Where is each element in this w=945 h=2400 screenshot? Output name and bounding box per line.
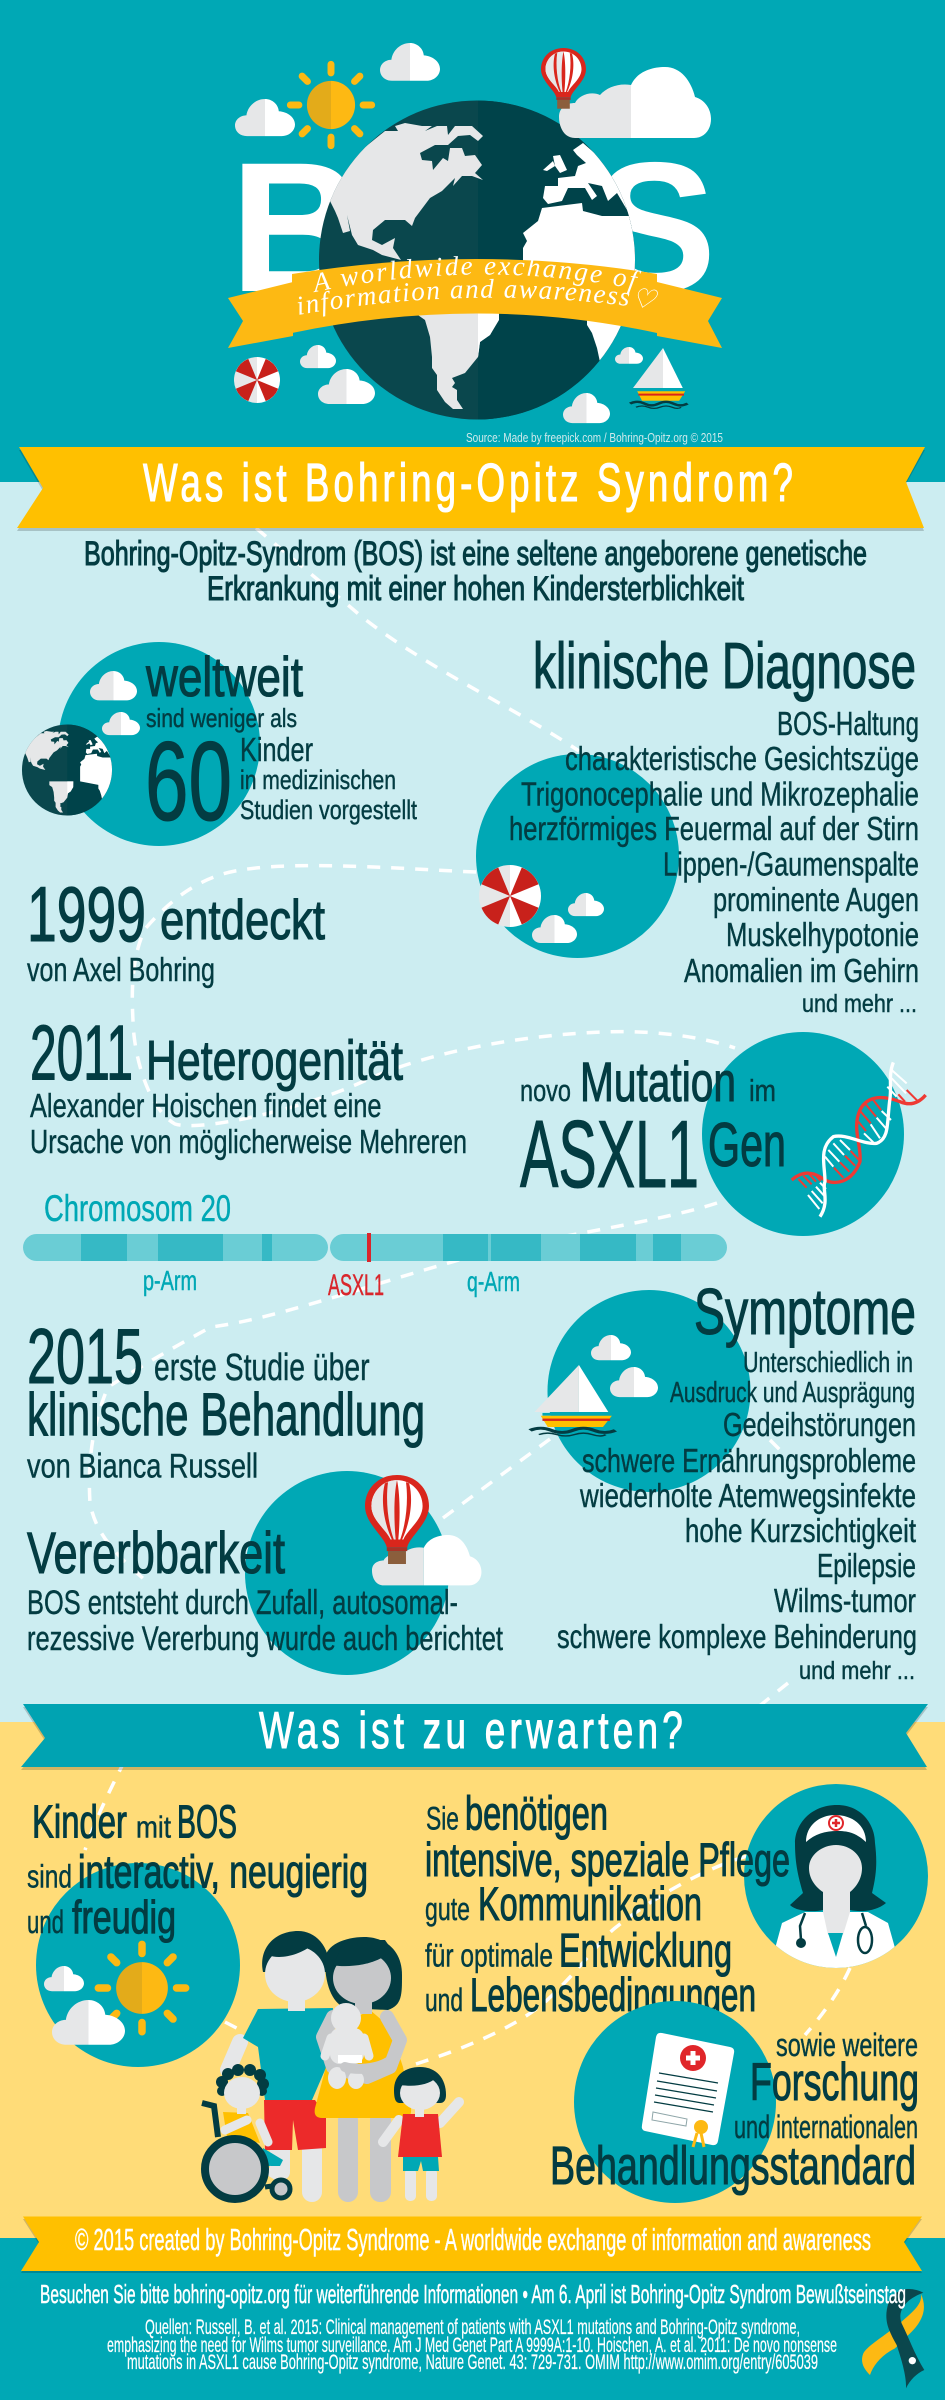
text block: für optimale (425, 1938, 553, 1974)
circle (702, 1032, 904, 1236)
text block: in medizinischen (240, 765, 396, 795)
panel: weltweit (19, 642, 417, 846)
text block (145, 645, 417, 844)
background: teal top (0, 0, 945, 483)
circle (548, 1290, 750, 1492)
circle (744, 1784, 928, 1968)
text block: BOS entsteht durch Zufall, autosomal- (27, 1584, 458, 1622)
icon: awareness ribbon (862, 2289, 924, 2388)
text block: 2015 klinische Behandlung: 2015 (27, 1312, 143, 1400)
background: teal footer (0, 2238, 945, 2400)
icon: sailboat (530, 1365, 615, 1436)
banner: Was ist Bohring-Opitz Syndrom? (17, 447, 925, 531)
girl waving (383, 2067, 459, 2201)
text block: Mutation (580, 1050, 736, 1113)
labels: q-Arm (467, 1266, 520, 1297)
text block: 1999 entdeckt: von Axel Bohring (27, 951, 215, 988)
icon: sailboat (630, 348, 688, 408)
text block: interactiv, neugierig (78, 1846, 368, 1898)
labels: ASXL1 (328, 1269, 384, 1302)
text block: Studien vorgestellt (240, 795, 417, 825)
symptom list: und mehr ... (799, 1657, 915, 1685)
text block: sind (27, 1858, 72, 1894)
icon: clouds (90, 671, 140, 735)
background: light blue section (0, 482, 945, 1722)
footer: sources (107, 2316, 837, 2374)
dashed connector path (85, 528, 850, 2064)
banner: copyright (21, 2216, 922, 2273)
text block: Entwicklung (559, 1924, 732, 1976)
panel: klinische Diagnose (476, 629, 919, 1018)
text block: weltweit (145, 645, 303, 708)
icon: hot air balloon (541, 48, 586, 109)
circle (58, 642, 260, 846)
heading: Was ist zu erwarten? (259, 1702, 687, 1760)
text block: 1999 entdeckt: entdeckt (160, 888, 325, 951)
panel: Pflege and nurse (425, 1784, 928, 2021)
panel: Vererbbarkeit (27, 1471, 503, 1675)
chromosome diagram (23, 1188, 727, 1302)
panel: ASXL1 mutation (520, 1032, 926, 1236)
icon: medical document (642, 2033, 734, 2147)
text block: novo (520, 1073, 571, 1108)
text block: 2011 Heterogenität: Ursache von möglicherweise Mehreren (30, 1123, 467, 1160)
text block: Sie (426, 1800, 459, 1836)
icon: clouds (44, 1966, 125, 2045)
text block: 1999 entdeckt (27, 870, 325, 988)
text block: 60 (145, 719, 232, 844)
illustration: family (202, 1931, 459, 2202)
icon: beach ball (234, 357, 280, 403)
icon: clouds (532, 893, 604, 943)
intro text (84, 535, 867, 608)
text block: und (27, 1904, 64, 1940)
hero illustration: BOS globe (228, 43, 723, 445)
text block: Gen (708, 1111, 786, 1180)
text block: 2015 klinische Behandlung: klinische Behandlung (27, 1381, 425, 1448)
icon: nurse (776, 1805, 895, 1972)
text block: 2011 Heterogenität: 2011 (30, 1008, 133, 1096)
labels (143, 1265, 520, 1302)
circle (245, 1471, 449, 1675)
background: yellow section (0, 1722, 945, 2239)
source credit: Source: Made by freepick.com / Bohring-Opitz.org © 2015 (466, 430, 723, 445)
text block: mit (136, 1810, 171, 1844)
text block: Kinder (32, 1796, 127, 1848)
text block: benötigen (465, 1786, 608, 1840)
diagnosis list (509, 705, 919, 1018)
mother with baby (315, 1937, 411, 2202)
yellow curved ribbon (228, 256, 722, 348)
text block: 2015 klinische Behandlung: von Bianca Russell (27, 1448, 258, 1486)
icon: small globe (19, 724, 113, 816)
circle (476, 754, 679, 958)
text block: 2015 klinische Behandlung: erste Studie über (154, 1347, 370, 1389)
icon: beach ball (479, 865, 541, 927)
text block: 2011 Heterogenität (30, 1008, 467, 1160)
text block: 1999 entdeckt: 1999 (27, 870, 146, 958)
diagnosis list: und mehr ... (802, 990, 917, 1018)
circle (36, 1863, 240, 2067)
text block (550, 2027, 919, 2196)
icon: hot air balloon (365, 1475, 429, 1564)
father (228, 1931, 333, 2202)
panel: Kinder mit BOS (27, 1796, 368, 2067)
text block (425, 1786, 790, 2021)
text block (520, 1050, 786, 1208)
panel: Symptome (530, 1275, 917, 1685)
icon: cloud (372, 1535, 481, 1585)
text block: 2011 Heterogenität: Heterogenität (146, 1028, 403, 1092)
child in wheelchair (202, 2064, 290, 2199)
labels: p-Arm (143, 1265, 197, 1296)
text block: Kommunikation (478, 1877, 702, 1930)
ribbon slogan: A worldwide exchange of (314, 256, 642, 294)
text block: Lebensbedingungen (470, 1968, 756, 2021)
ribbon slogan: information and awareness♡ (298, 278, 658, 317)
title letters BOS: BOS (230, 125, 716, 331)
text block: 2011 Heterogenität: Alexander Hoischen findet eine (30, 1087, 382, 1124)
text block: und (425, 1982, 463, 2018)
text block (27, 1521, 503, 1658)
text block: sind weniger als (146, 703, 297, 733)
text block: rezessive Vererbung wurde auch berichtet (27, 1620, 503, 1658)
banner: Was ist zu erwarten? (21, 1702, 928, 1770)
text block: freudig (72, 1891, 176, 1943)
icon: clouds (235, 43, 711, 423)
chromosome title: Chromosom 20 (44, 1188, 231, 1229)
text block: BOS (177, 1796, 237, 1848)
q-arm bar (330, 1233, 727, 1262)
text block: ASXL1 (520, 1101, 699, 1208)
symptom list (557, 1347, 917, 1685)
text block: gute (425, 1891, 470, 1927)
p-arm bar (23, 1234, 328, 1261)
text block: im (749, 1073, 776, 1108)
text block (27, 1796, 368, 1943)
text block: Kinder (240, 731, 313, 768)
text block: intensive, speziale Pflege (425, 1833, 790, 1886)
panel: Forschung and standard (550, 2001, 919, 2203)
circle (574, 2001, 776, 2203)
ribbon slogan (298, 256, 658, 317)
text block: Vererbbarkeit (27, 1521, 285, 1586)
intro text: Erkrankung mit einer hohen Kindersterblichkeit (207, 570, 744, 608)
icon: sun (290, 64, 372, 146)
text block: 2015 klinische Behandlung (27, 1312, 425, 1486)
icon: globe (310, 100, 640, 420)
icon: clouds (591, 1335, 658, 1397)
icon: DNA helix (792, 1062, 926, 1217)
icon: sun (98, 1944, 186, 2032)
